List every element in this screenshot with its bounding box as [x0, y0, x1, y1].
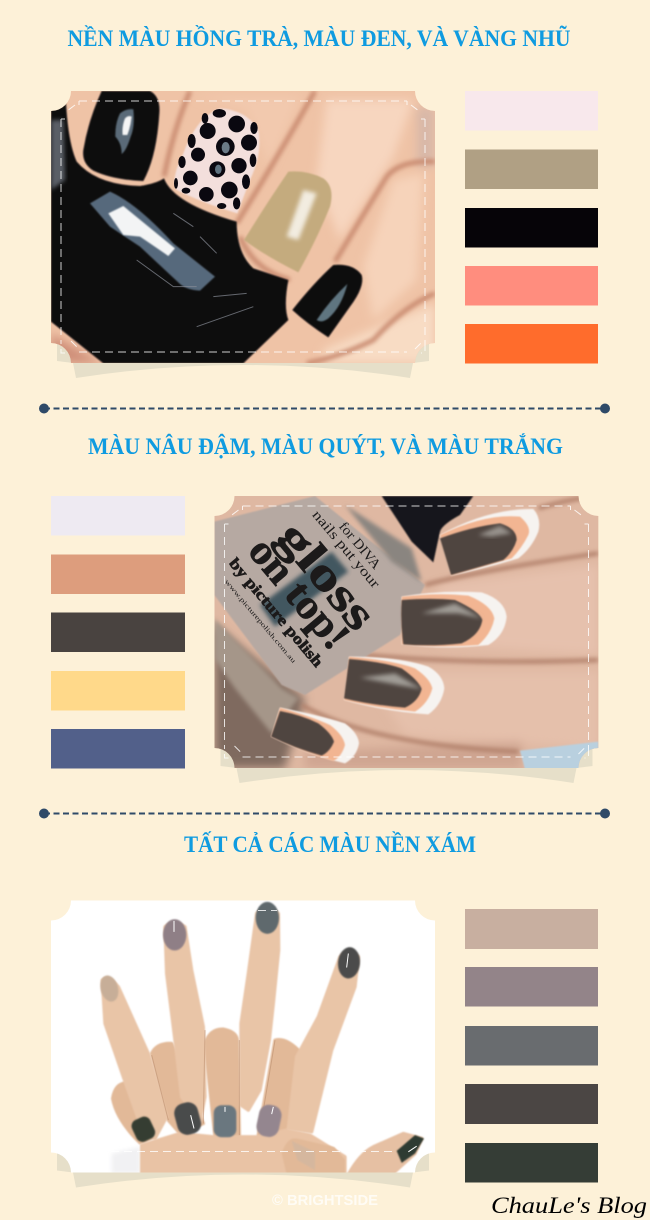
panel: photo of brown, peach and white nails [214, 496, 598, 783]
panel: photo of brown, peach and white nails: for DIVA [335, 520, 383, 573]
nail 4 [271, 708, 359, 763]
panel: photo of brown, peach and white nails: by picture polish [225, 555, 327, 671]
colour swatches: section 2 [51, 496, 185, 768]
nail 2 [402, 592, 507, 647]
divider 1 [39, 404, 610, 414]
back fingers [113, 1029, 303, 1143]
nail 1 [440, 509, 539, 576]
bottle [51, 103, 288, 363]
front fingers [102, 908, 358, 1138]
title: section 2: MÀU NÂU ĐẬM, MÀU QUÝT, VÀ MÀU TRẮNG [88, 433, 563, 459]
gold nail [244, 171, 331, 272]
nail 1 [83, 91, 159, 181]
panel: photo of brown, peach and white nails: nails put your [309, 508, 382, 592]
colour swatches: section 3 [465, 909, 598, 1182]
panel: photo of brown, peach and white nails: www.picturepolish.com.au [223, 578, 297, 665]
panel: photo of hands with grey nails [51, 900, 435, 1188]
colour swatches: section 1 [465, 91, 598, 364]
panel: photo of black, polka dot and gold nails [51, 91, 435, 378]
palm [142, 1130, 345, 1174]
watermark: © BRIGHTSIDE [272, 1192, 378, 1209]
title: section 3: TẤT CẢ CÁC MÀU NỀN XÁM [184, 831, 476, 857]
polka nail [174, 108, 259, 213]
nail 4 [292, 265, 362, 337]
nail 3 [344, 657, 444, 714]
panel: photo of brown, peach and white nails: gloss [267, 511, 387, 640]
divider 2 [39, 808, 610, 818]
title: section 1: NỀN MÀU HỒNG TRÀ, MÀU ĐEN, VÀ VÀNG NHŨ [68, 25, 571, 51]
panel: photo of brown, peach and white nails: on top! [239, 529, 359, 659]
thumb and far finger [283, 1140, 343, 1174]
bottle [214, 496, 425, 695]
blog signature: ChauLe's Blog [491, 1193, 647, 1218]
